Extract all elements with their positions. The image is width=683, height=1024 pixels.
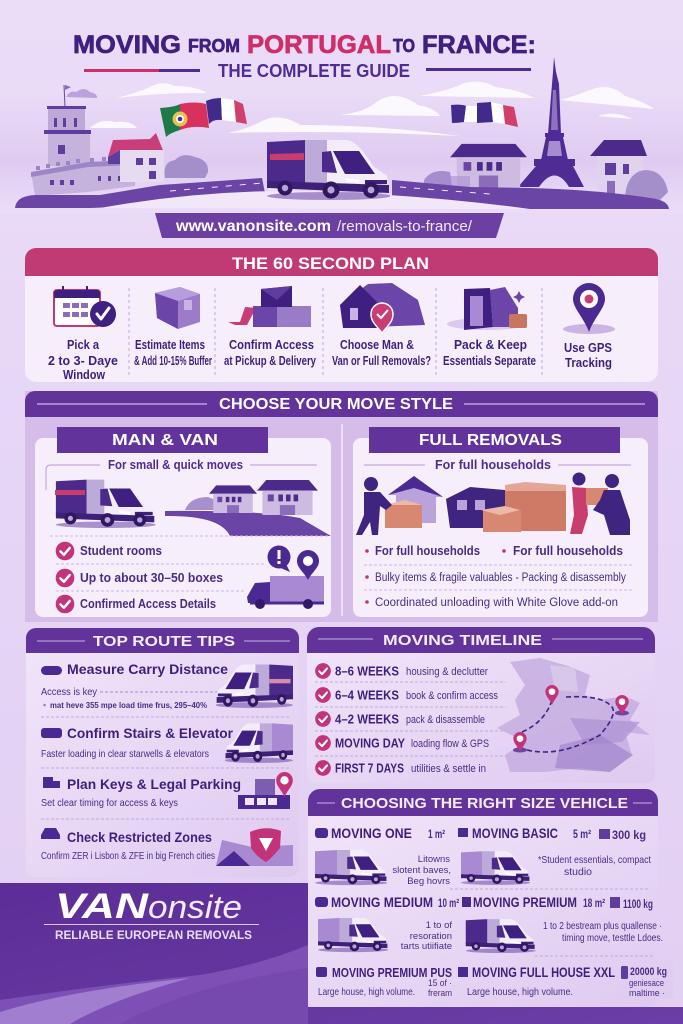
- vehicle: moving full house XXL: 20000 kg: [630, 966, 667, 978]
- VANonsite logo: VAN: [55, 887, 149, 926]
- icon: calendar with check: [54, 286, 116, 327]
- timeline rows: MOVING DAY: [335, 736, 406, 750]
- vehicle: moving premium: 1 to 2 bestream plus quallense ·: [543, 921, 662, 932]
- icon: GPS pin: [563, 283, 615, 334]
- full removals banner: FULL REMOVALS: [419, 432, 562, 449]
- plan heading: THE 60 SECOND PLAN: [232, 254, 429, 273]
- footer band: [0, 883, 683, 1024]
- plan heading: [25, 248, 658, 276]
- timeline rows: 8–6 WEEKS: [335, 664, 399, 678]
- step labels: Tracking: [565, 356, 612, 370]
- tip: measure carry distance: Measure Carry Distance: [67, 661, 228, 677]
- title: TO: [393, 36, 415, 56]
- timeline rows: loading flow & GPS: [411, 738, 489, 750]
- tip: measure carry distance: Access is key: [41, 686, 98, 698]
- vehicle: moving medium: resoration: [410, 931, 452, 942]
- checklist: Confirmed Access Details: [80, 597, 216, 611]
- VANonsite logo: onsite: [148, 889, 242, 925]
- icon: packed door and bag: [447, 287, 527, 330]
- VANonsite logo: [44, 887, 259, 926]
- vehicle: moving premium plus: MOVING PREMIUM PUS: [332, 965, 452, 980]
- step labels: [48, 338, 612, 382]
- hero van: [267, 140, 391, 200]
- French flag left: [206, 98, 247, 124]
- icon: alert and pin with van: [247, 546, 324, 609]
- route tips heading: [26, 628, 299, 653]
- panel: top route tips: [26, 628, 299, 877]
- step labels: Choose Man &: [340, 338, 414, 352]
- timeline rows: 6–4 WEEKS: [335, 688, 399, 702]
- subtitle: THE COMPLETE GUIDE: [218, 61, 410, 81]
- Portuguese flag: [160, 102, 209, 137]
- vehicle: moving full house XXL: [458, 965, 667, 998]
- trees left: [164, 155, 208, 178]
- vehicle: moving full house XXL: geniesace: [629, 978, 664, 988]
- step labels: & Add 10-15% Buffer: [134, 354, 212, 368]
- panel: choose your move style: [25, 391, 658, 622]
- timeline rows: [315, 663, 506, 776]
- vehicle: moving one: Beg hovrs: [407, 876, 450, 887]
- tagline: RELIABLE EUROPEAN REMOVALS: [55, 930, 252, 942]
- pink-roof building: [108, 133, 164, 182]
- vehicle: moving basic: [458, 826, 651, 885]
- vehicle: moving premium plus: freram: [428, 988, 452, 999]
- map of route: [497, 658, 650, 772]
- illustration: movers, houses and boxes: [356, 472, 630, 535]
- icon: house with check pin: [340, 283, 425, 333]
- timeline rows: pack & disassemble: [406, 714, 485, 726]
- step labels: Confirm Access: [229, 338, 314, 352]
- vehicle: moving premium: [462, 895, 663, 953]
- card: man and van: [35, 427, 331, 617]
- step labels: Use GPS: [564, 341, 612, 355]
- timeline rows: FIRST 7 DAYS: [335, 762, 404, 776]
- tip: check restricted zones: [41, 828, 293, 866]
- tip: measure carry distance: mat heve 355 mpe load time frus, 295–40%: [50, 700, 207, 710]
- step labels: Window: [63, 368, 105, 382]
- icon: building and pin: [238, 772, 293, 809]
- French flag right: [451, 102, 518, 127]
- vehicle: moving premium: MOVING PREMIUM: [473, 895, 577, 910]
- vehicle: moving premium: 1100 kg: [623, 897, 653, 911]
- clouds: [90, 82, 654, 136]
- website URL banner: /removals-to-france/: [337, 218, 473, 235]
- vehicle: moving one: Litowns: [418, 854, 450, 865]
- step labels: Van or Full Removals?: [332, 354, 431, 368]
- vehicle: moving medium: [315, 895, 459, 952]
- checklist: full removals features: For full households: [375, 544, 480, 558]
- icon: map with shield: [216, 828, 293, 866]
- checklist: [56, 542, 265, 613]
- vehicle: moving basic: 5 m²: [573, 827, 591, 841]
- tip: plan keys and legal parking: Plan Keys & Legal Parking: [67, 776, 241, 792]
- panel: moving timeline: [307, 627, 655, 783]
- vehicle: moving full house XXL: Large house, high volume.: [467, 986, 573, 998]
- vehicle: moving basic: 300 kg: [612, 828, 646, 842]
- step labels: Essentials Separate: [443, 354, 536, 368]
- title: MOVING: [73, 31, 181, 59]
- vehicle: moving basic: studio: [564, 866, 592, 878]
- full removals banner: [369, 427, 620, 453]
- icon: delivery truck: [224, 723, 293, 763]
- illustration: van and houses: [55, 480, 331, 536]
- title: FROM: [188, 36, 240, 56]
- French house centre: [445, 144, 527, 188]
- vehicle: moving one: [315, 826, 451, 887]
- step labels: 2 to 3- Daye: [48, 354, 118, 368]
- vehicle: moving basic: MOVING BASIC: [472, 826, 558, 841]
- vehicle: moving basic: *Student essentials, compact: [538, 854, 651, 866]
- tip: check restricted zones: Check Restricted Zones: [67, 829, 212, 845]
- website URL banner: [155, 213, 504, 238]
- vehicle: moving premium plus: Large house, high volume.: [318, 986, 415, 998]
- tip: plan keys and legal parking: Set clear timing for access & keys: [41, 797, 178, 809]
- website URL banner: www.vanonsite.com: [175, 218, 331, 235]
- title: PORTUGAL: [247, 31, 391, 59]
- man and van banner: [57, 427, 268, 453]
- vehicle: moving medium: MOVING MEDIUM: [331, 895, 433, 910]
- tower and castle: [31, 85, 135, 196]
- timeline rows: book & confirm access: [406, 690, 498, 702]
- full removals subtitle: For full households: [435, 458, 551, 472]
- vehicle: moving medium: 10 m²: [438, 896, 459, 910]
- French house right: [590, 140, 647, 194]
- man and van banner: MAN & VAN: [112, 432, 218, 449]
- vehicle: moving premium: timing move, testtle Ldoes.: [562, 933, 663, 944]
- tip: confirm stairs and elevator: Confirm Stairs & Elevator: [67, 725, 234, 741]
- hero illustration: Portugal to France road scene: [0, 57, 683, 213]
- panel: choosing the right size vehicle: [308, 789, 673, 1007]
- vehicle: moving one: 1 m²: [428, 827, 445, 841]
- tip: measure carry distance: [41, 661, 293, 710]
- card: full removals: [353, 427, 648, 617]
- checklist: full removals features: For full households: [513, 544, 623, 558]
- road and ground: [15, 178, 266, 208]
- vehicle: moving premium: 18 m²: [583, 896, 605, 910]
- route tips heading: TOP ROUTE TIPS: [93, 634, 235, 650]
- tip: check restricted zones: Confirm ZER i Lisbon & ZFE in big French cities: [41, 850, 215, 862]
- timeline rows: utilities & settle in: [411, 763, 486, 775]
- vehicle size heading: CHOOSING THE RIGHT SIZE VEHICLE: [341, 795, 628, 812]
- subtitle: [84, 61, 531, 81]
- timeline rows: 4–2 WEEKS: [335, 712, 399, 726]
- vehicle: moving one: MOVING ONE: [331, 826, 412, 841]
- vehicle: moving full house XXL: MOVING FULL HOUSE XXL: [472, 965, 615, 980]
- vehicle: moving one: slotent baves,: [392, 865, 451, 876]
- vehicle: moving premium plus: [316, 965, 452, 999]
- step labels: Estimate Items: [135, 338, 205, 352]
- panel: the 60 second plan: [25, 248, 658, 382]
- move style heading: [25, 391, 658, 417]
- vehicle: moving medium: tarts utiifiate: [401, 941, 452, 952]
- icon: stacked boxes: [228, 286, 311, 327]
- icon: delivery truck: [215, 664, 293, 708]
- step labels: Pick a: [67, 338, 100, 352]
- Eiffel tower: [518, 57, 584, 187]
- vehicle: moving full house XXL: maltime ·: [629, 988, 665, 998]
- timeline heading: MOVING TIMELINE: [383, 633, 542, 649]
- checklist: Up to about 30–50 boxes: [80, 571, 223, 585]
- checklist: full removals features: Coordinated unloading with White Glove add-on: [375, 597, 618, 609]
- title: [73, 31, 536, 59]
- checklist: full removals features: [364, 544, 634, 609]
- move style heading: CHOOSE YOUR MOVE STYLE: [219, 396, 453, 413]
- timeline rows: housing & declutter: [406, 666, 488, 678]
- vehicle: moving medium: 1 to of: [426, 920, 452, 931]
- tip: plan keys and legal parking: [41, 772, 293, 809]
- tip: confirm stairs and elevator: Faster loading in clear starwells & elevators: [41, 748, 209, 760]
- checklist: full removals features: Bulky items & fragile valuables - Packing & disassembly: [375, 572, 626, 584]
- icon: cardboard box: [155, 287, 200, 329]
- timeline heading: [307, 627, 655, 653]
- man and van subtitle: For small & quick moves: [108, 458, 243, 472]
- title: FRANCE:: [422, 31, 536, 59]
- trees right: [625, 170, 668, 200]
- vehicle size heading: [308, 789, 658, 816]
- step labels: Pack & Keep: [454, 338, 527, 352]
- tip: confirm stairs and elevator: [41, 723, 293, 763]
- checklist: Student rooms: [80, 544, 162, 558]
- man and van subtitle: [46, 458, 317, 490]
- step labels: at Pickup & Delivery: [224, 354, 316, 368]
- vehicle: moving premium plus: 15 of ·: [428, 978, 452, 989]
